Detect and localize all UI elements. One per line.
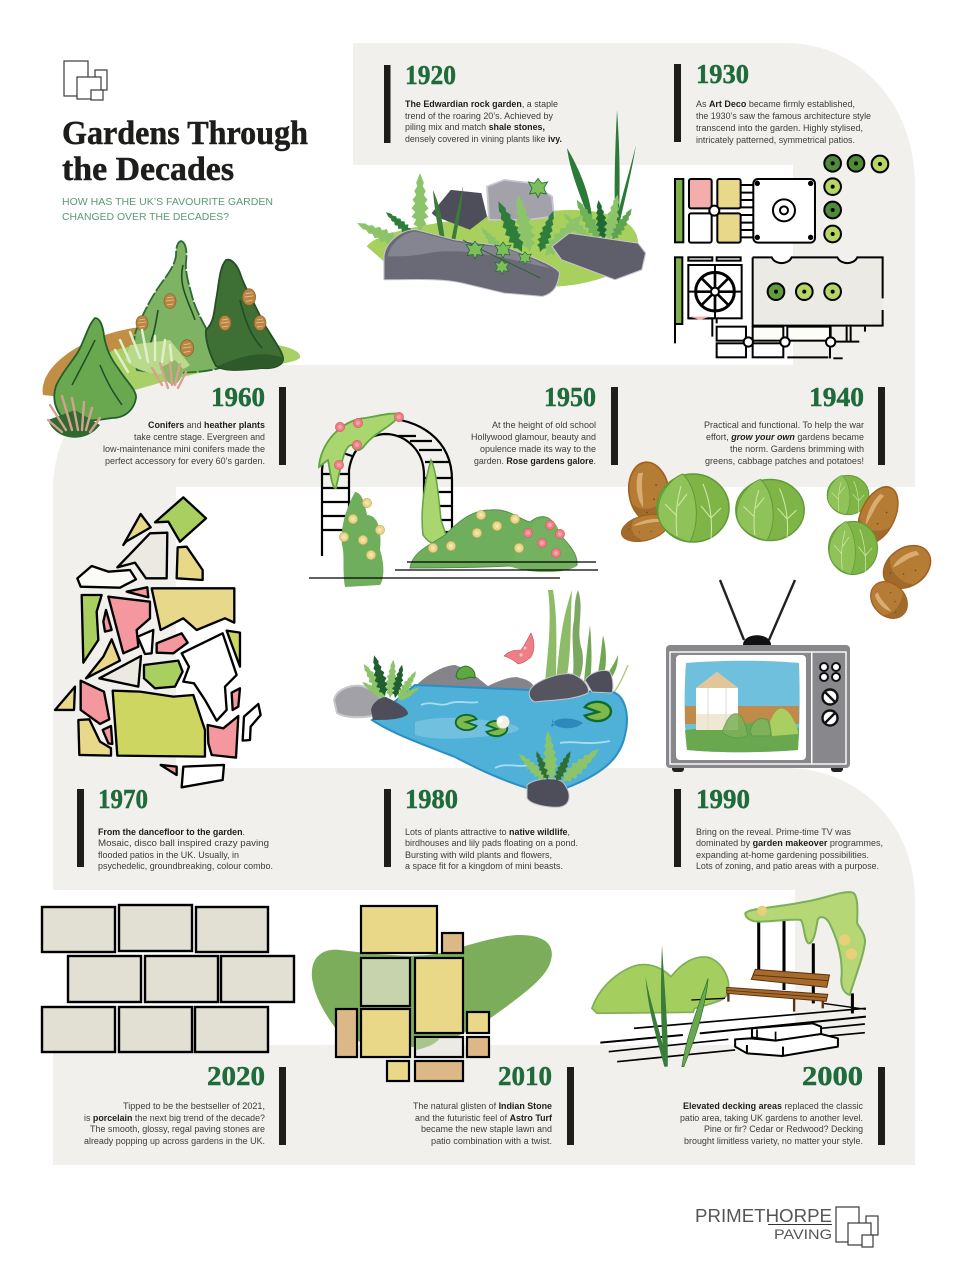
text block: take centre stage. Evergreen and xyxy=(134,432,265,442)
year: 1990 xyxy=(696,784,750,814)
text block: Tipped to be the bestseller of 2021, xyxy=(123,1101,265,1111)
text block: brought limitless variety, no matter your style. xyxy=(684,1136,863,1146)
text block: Lots of zoning, and patio areas with a purpose. xyxy=(696,861,879,871)
background panel: winding path xyxy=(53,43,915,1165)
year: 1970 xyxy=(98,784,148,814)
illustration: elevated decking xyxy=(592,892,866,1067)
bar xyxy=(878,1067,885,1145)
text block: perfect accessory for every 60’s garden. xyxy=(105,456,265,466)
text block: became the new staple lawn and xyxy=(421,1124,552,1134)
subtitle: CHANGED OVER THE DECADES? xyxy=(62,212,229,223)
bar xyxy=(674,64,681,142)
year: 2010 xyxy=(498,1061,552,1091)
text block: transcend into the garden. Highly stylised, xyxy=(696,123,863,133)
text block: Lots of plants attractive to native wildlife, xyxy=(405,827,570,837)
illustration: art deco patio plans xyxy=(675,155,888,358)
text block: opulence made its way to the xyxy=(480,444,596,454)
text block: dominated by garden makeover programmes, xyxy=(696,838,883,848)
year: 1980 xyxy=(405,784,458,814)
text block xyxy=(103,420,265,466)
text block: At the height of old school xyxy=(492,420,596,430)
year: 1920 xyxy=(405,60,456,90)
text block: the 1930’s saw the famous architecture style xyxy=(696,111,871,121)
text block: expanding at-home gardening possibilities. xyxy=(696,850,869,860)
panel: 1970 xyxy=(55,497,273,871)
text block xyxy=(413,1101,552,1146)
bar xyxy=(384,789,391,867)
year: 1960 xyxy=(211,382,265,412)
text block: densely covered in vining plants like ivy. xyxy=(405,134,562,144)
text block xyxy=(98,827,273,871)
text block: already popping up across gardens in the UK. xyxy=(84,1136,265,1146)
text block xyxy=(405,827,578,871)
text block: Bring on the reveal. Prime-time TV was xyxy=(696,827,852,837)
text block xyxy=(704,420,864,466)
panel: 1990 xyxy=(666,580,883,871)
panel: 2020 xyxy=(42,905,294,1146)
year: 1940 xyxy=(809,382,864,412)
text block xyxy=(84,1101,265,1146)
illustration: porcelain paving xyxy=(42,905,294,1052)
panel: 1930 xyxy=(674,59,888,358)
text block: is porcelain the next big trend of the decade? xyxy=(84,1113,265,1123)
text block: Pine or fir? Cedar or Redwood? Decking xyxy=(704,1124,863,1134)
footer logo: Primethorpe Paving: PRIMETHORPE xyxy=(695,1206,832,1226)
text block: From the dancefloor to the garden. xyxy=(98,827,245,837)
text block: intricately patterned, symmetrical patios. xyxy=(696,135,855,145)
title: Gardens Through xyxy=(62,115,308,152)
bar xyxy=(611,387,618,465)
text block: Elevated decking areas replaced the classic xyxy=(683,1101,864,1111)
text block: the norm. Gardens brimming with xyxy=(730,444,864,454)
bar xyxy=(279,387,286,465)
text block: The natural glisten of Indian Stone xyxy=(413,1101,552,1111)
text block: Conifers and heather plants xyxy=(148,420,265,430)
panel: 1950 xyxy=(309,382,618,587)
subtitle: HOW HAS THE UK’S FAVOURITE GARDEN xyxy=(62,197,273,208)
illustration: wildlife pond xyxy=(334,590,628,807)
text block: Bursting with wild plants and flowers, xyxy=(405,850,552,860)
text block xyxy=(680,1101,864,1146)
text block xyxy=(405,99,562,144)
year: 1950 xyxy=(544,382,596,412)
title: the Decades xyxy=(62,151,234,188)
text block: a space fit for a kingdom of mini beasts. xyxy=(405,861,563,871)
text block: garden. Rose gardens galore. xyxy=(474,456,596,466)
text block: flooded patios in the UK. Usually, in xyxy=(98,850,239,860)
panel: 2010 xyxy=(312,906,574,1146)
text block xyxy=(696,827,883,871)
panel: 1980 xyxy=(334,590,628,871)
text block: trend of the roaring 20’s. Achieved by xyxy=(405,111,554,121)
text block: piling mix and match shale stones, xyxy=(405,122,545,132)
text block: The smooth, glossy, regal paving stones are xyxy=(90,1124,265,1134)
text block: effort, grow your own gardens became xyxy=(706,432,864,442)
bar xyxy=(674,789,681,867)
illustration: rose arch xyxy=(309,412,598,587)
subtitle xyxy=(62,197,273,223)
logo mark: top xyxy=(64,61,107,100)
text block: patio area, taking UK gardens to another level. xyxy=(680,1113,863,1123)
year: 2000 xyxy=(802,1061,863,1091)
bar xyxy=(279,1067,286,1145)
illustration: Indian stone and astro turf xyxy=(312,906,552,1081)
panel: 1940 xyxy=(619,382,939,626)
text block: As Art Deco became firmly established, xyxy=(696,99,855,109)
footer logo: Primethorpe Paving xyxy=(695,1206,878,1247)
text block: The Edwardian rock garden, a staple xyxy=(405,99,558,109)
bar xyxy=(384,65,390,143)
text block: and the futuristic feel of Astro Turf xyxy=(415,1113,552,1123)
text block: Hollywood glamour, beauty and xyxy=(471,432,596,442)
text block: Mosaic, disco ball inspired crazy paving xyxy=(98,838,269,848)
text block: patio combination with a twist. xyxy=(431,1136,552,1146)
year: 2020 xyxy=(207,1061,265,1091)
text block xyxy=(471,420,596,466)
illustration: conifers and heather xyxy=(43,241,300,438)
bar xyxy=(77,789,84,867)
year: 1930 xyxy=(696,59,749,89)
footer logo: Primethorpe Paving: PAVING xyxy=(774,1226,832,1242)
bar xyxy=(567,1067,574,1145)
text block: Practical and functional. To help the war xyxy=(704,420,864,430)
illustration: television xyxy=(666,580,850,772)
text block: greens, cabbage patches and potatoes! xyxy=(705,456,864,466)
illustration: potatoes and cabbages xyxy=(619,460,939,626)
title xyxy=(62,115,308,188)
text block xyxy=(696,99,871,145)
illustration: rock garden xyxy=(354,110,646,296)
text block: psychedelic, groundbreaking, colour combo. xyxy=(98,861,273,871)
text block: low-maintenance mini conifers made the xyxy=(103,444,265,454)
panel: 1960 xyxy=(43,241,300,466)
bar xyxy=(878,387,885,465)
illustration: crazy paving mosaic xyxy=(55,497,261,787)
panel: 2000 xyxy=(592,892,885,1146)
text block: birdhouses and lily pads floating on a pond. xyxy=(405,838,578,848)
panel: 1920 xyxy=(354,60,646,296)
